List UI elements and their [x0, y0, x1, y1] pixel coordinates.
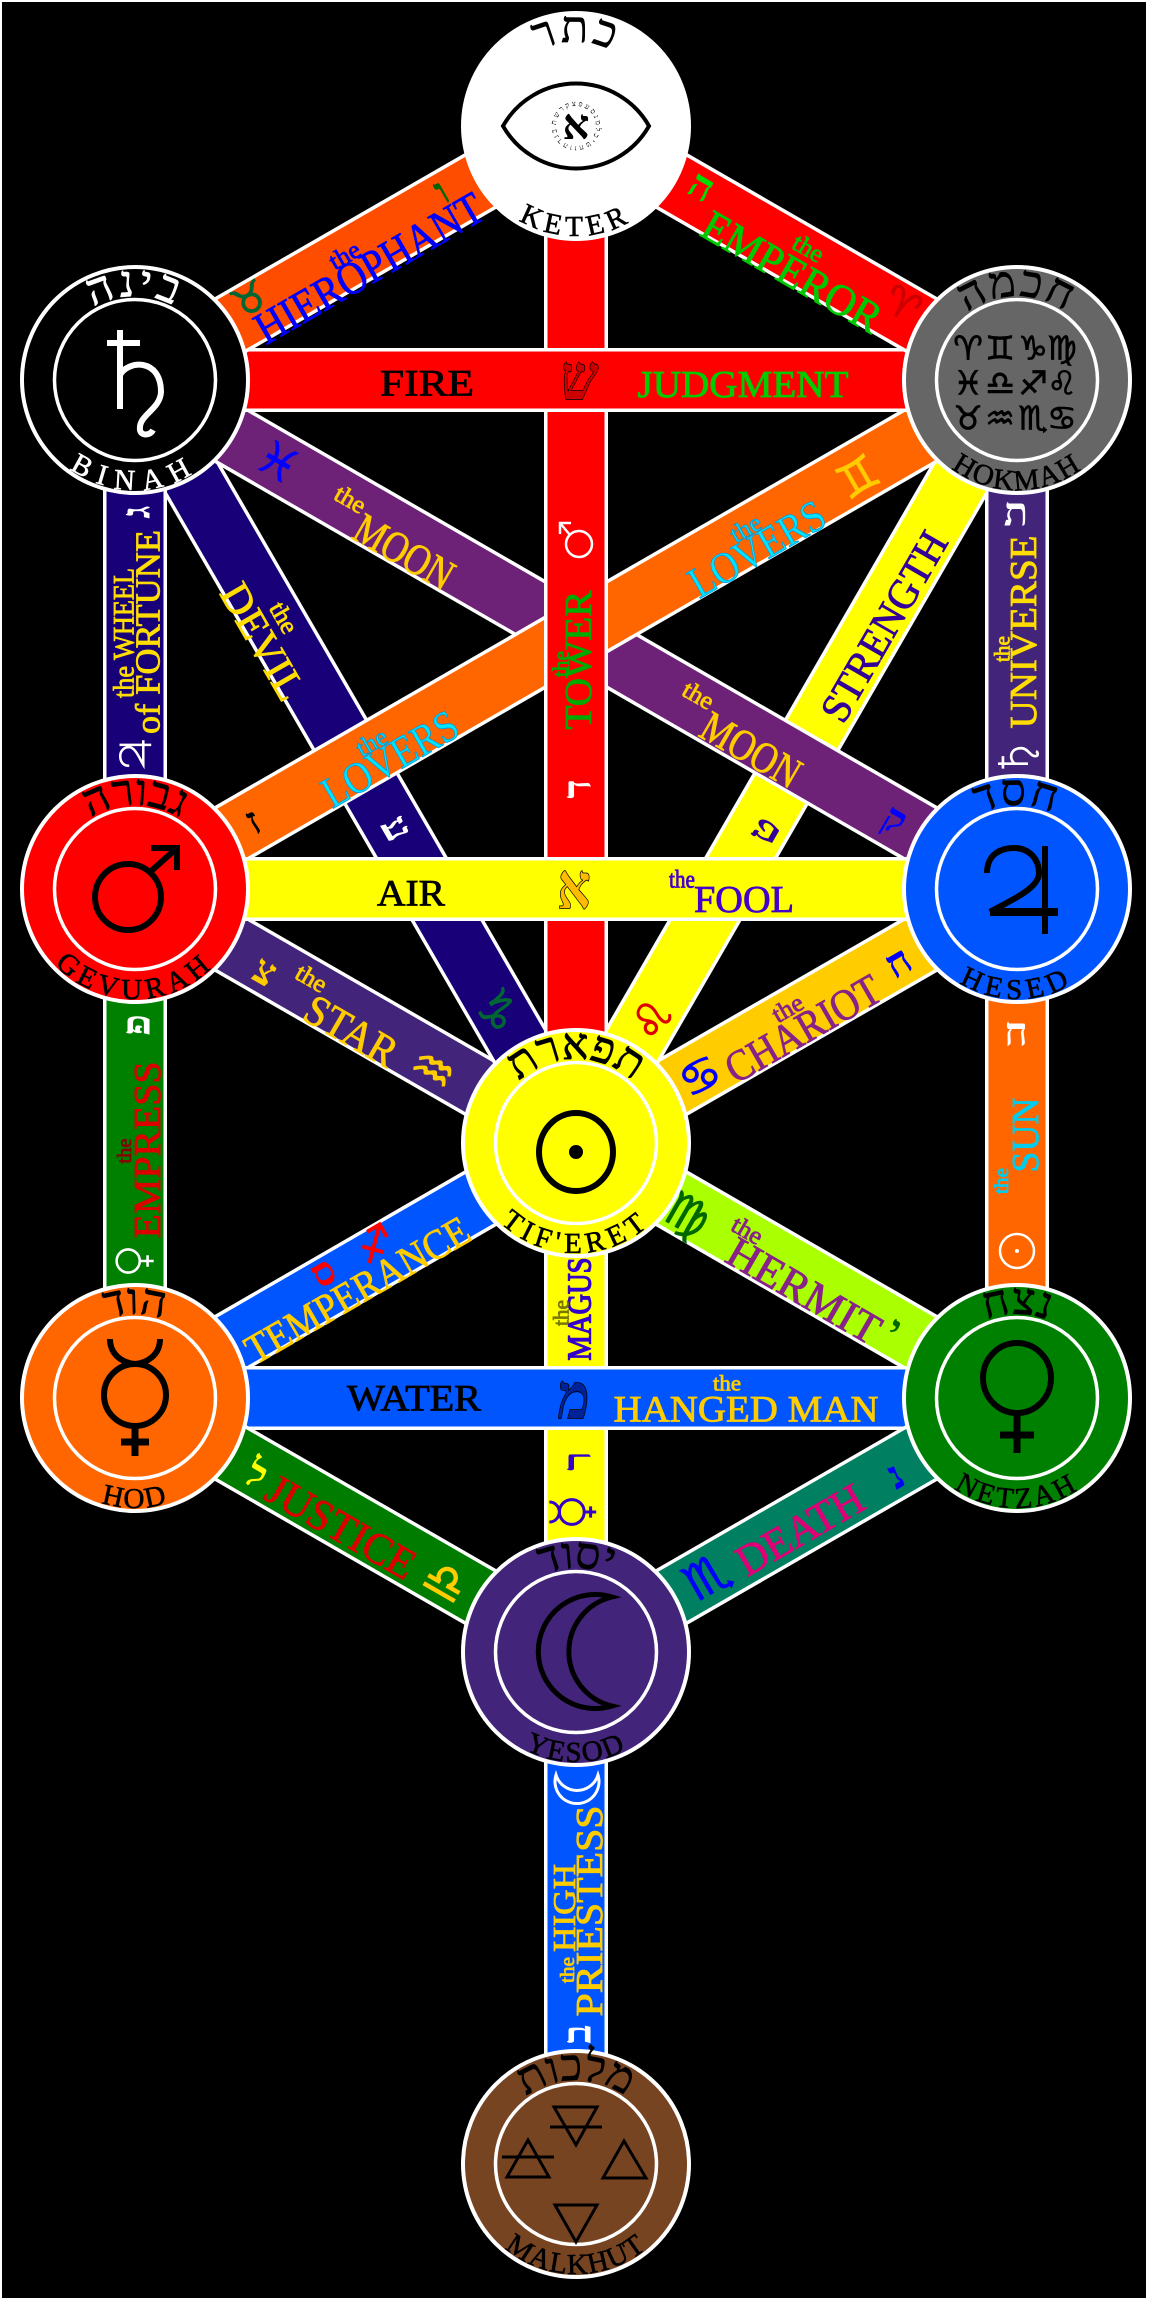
path: the Tower: TOWER [558, 590, 600, 730]
path: the Sun: ח [1004, 1010, 1028, 1054]
path: the Moon: the [329, 480, 371, 520]
path: the Sun [991, 889, 1047, 1398]
sephirah: Hesed [902, 774, 1132, 1004]
sephirah: Hokmah [902, 265, 1132, 495]
path: Death: ♏︎ [673, 1541, 741, 1613]
path: the Emperor: ♈︎ [875, 276, 929, 334]
path: the Star: the [290, 959, 332, 999]
path: the Devil: DEVIL [210, 575, 314, 709]
path: the Moon: MOON [345, 504, 463, 600]
path: the Lovers [135, 380, 1017, 889]
icon: zodiac grid: ♍︎ [1047, 328, 1077, 368]
sephirah: Tiferet [461, 1028, 691, 1258]
path: the Universe: UNIVERSE [1003, 536, 1045, 728]
sephirah: Keter: כתר [530, 16, 616, 48]
sephirah: Hokmah: HOKMAH [951, 452, 1082, 491]
path: the Devil: ע [372, 807, 422, 849]
icon: zodiac grid: ♒︎ [985, 398, 1015, 438]
path: the Hierophant: ♉︎ [223, 271, 277, 329]
icon: zodiac grid: ♎︎ [985, 364, 1015, 402]
icon: Moon [538, 1594, 612, 1708]
sephirah: Binah [20, 265, 250, 495]
path: Fire / Judgment: JUDGMENT [638, 364, 848, 406]
path: the Universe: the [990, 636, 1014, 662]
path: Temperance: ♐︎ [346, 1213, 404, 1275]
path: the Moon: the [677, 676, 719, 716]
sephirah: Netzah: נצח [983, 1287, 1051, 1319]
path: Water / the Hanged Man: מ [554, 1362, 594, 1432]
path: Strength: ט [738, 808, 790, 852]
icon: crescent [555, 1775, 599, 1804]
path: Death [576, 1398, 1017, 1652]
path: the Devil: ♑︎ [461, 978, 531, 1044]
path: the Hierophant: HIEROPHANT [245, 182, 493, 354]
path: the Sun: the [991, 1168, 1013, 1194]
path: Wheel of Fortune [108, 380, 168, 889]
path: the Emperor: the [787, 229, 829, 269]
path: Water / the Hanged Man: HANGED MAN [614, 1390, 878, 1430]
icon: Saturn [107, 330, 161, 434]
icon: zodiac grid: ♑︎ [1018, 328, 1048, 368]
sephirah: Tiferet: תפארת [507, 1032, 643, 1080]
path: the Moon: ♓︎ [247, 428, 309, 496]
path: the Magus: ר [554, 1451, 600, 1471]
path: Death: נ [878, 1452, 912, 1498]
icon: Mars [560, 523, 592, 557]
sephirah: Hod: הוד [102, 1288, 166, 1318]
path: the Hermit [576, 1143, 1017, 1398]
path: the Universe [990, 380, 1045, 889]
path: Death: DEATH [727, 1474, 873, 1586]
sephirah: Binah: BINAH [70, 452, 192, 491]
path: the Moon: ק [874, 794, 916, 844]
sephirah: Binah: בינה [86, 270, 179, 306]
path: the Moon [135, 380, 1017, 889]
path: the Universe: ת [1004, 490, 1028, 534]
sephirah: Tiferet: TIF'ERET [503, 1208, 644, 1254]
path: the Moon: MOON [692, 702, 810, 798]
path: the Emperor [576, 126, 1017, 380]
path: Fire / Judgment: FIRE [380, 364, 474, 404]
icon: zodiac grid: ♏︎ [1018, 398, 1048, 438]
path: the Devil [135, 380, 576, 1143]
path: the High Priestess: HIGH [546, 1864, 582, 1952]
sephirah: Yesod [461, 1537, 691, 1767]
sephirah: Yesod: יסוד [536, 1542, 615, 1572]
sephirah: Malkhut [461, 2044, 691, 2279]
icon: Sun [539, 1113, 613, 1191]
icon: zodiac grid: ♌︎ [1047, 364, 1077, 402]
path: the Lovers: the [351, 723, 393, 763]
path: the Hermit: י [878, 1307, 910, 1351]
sephirah: Hokmah: חכמה [957, 270, 1074, 311]
path: the Magus: MAGUS [562, 1258, 598, 1360]
sephirah: Hod [20, 1283, 250, 1513]
sephirah: Hod: HOD [102, 1484, 164, 1508]
path: Air / the Fool: the [669, 866, 695, 894]
path: the Hermit: HERMIT [718, 1227, 890, 1355]
sephirah: Netzah [902, 1283, 1132, 1513]
path: the High Priestess: the [557, 1957, 579, 1983]
path: the Hierophant: ו [425, 169, 457, 213]
path: the Hierophant: the [324, 236, 366, 276]
sephirah: Malkhut: MALKHUT [504, 2232, 643, 2274]
path: the Empress: פ [114, 1014, 158, 1036]
path: the Emperor: EMPEROR [693, 201, 891, 344]
path: the Devil: the [263, 597, 303, 639]
sephirah: Netzah: NETZAH [954, 1472, 1078, 1509]
sephirah: Gevurah [20, 774, 250, 1004]
icon: Mars [95, 848, 177, 930]
path: the Tower: ד [554, 779, 600, 799]
sephirah: Hesed: HESED [959, 966, 1066, 1000]
path: the High Priestess: PRIESTESS [569, 1805, 611, 2017]
icon: zodiac grid [953, 328, 1077, 438]
icon: Mercury [104, 1339, 166, 1456]
icon: four elements [502, 2107, 646, 2242]
path: the Star: ♒︎ [399, 1034, 467, 1106]
path: the Chariot: CHARIOT [716, 965, 890, 1093]
path: the High Priestess: ב [554, 2024, 600, 2044]
path: Wheel of Fortune: of FORTUNE [128, 530, 168, 734]
path: Strength [576, 380, 1017, 1143]
path: the Lovers: ♊︎ [827, 443, 889, 511]
path: the Magus: the [548, 1300, 574, 1326]
path: Air / the Fool: AIR [377, 874, 445, 914]
path: Fire / Judgment [135, 343, 1017, 413]
path: the High Priestess [546, 1652, 611, 2164]
path: Air / the Fool: FOOL [694, 879, 794, 921]
path: Justice: ל [237, 1449, 276, 1498]
path: the Star: צ [245, 946, 285, 996]
path: the Lovers: ז [237, 799, 269, 843]
path: the Chariot: the [767, 989, 809, 1029]
icon: eye: בגדהוזחטיכלמנסעפצקרשת [552, 102, 602, 150]
path: the Lovers: the [725, 509, 767, 549]
icon: zodiac grid: ♐︎ [1018, 364, 1048, 402]
path: the Emperor: ה [681, 161, 723, 211]
path: the Star: STAR [295, 985, 407, 1078]
sephirah: Yesod: YESOD [530, 1732, 622, 1762]
path: the Empress: EMPRESS [127, 1062, 169, 1238]
path: Temperance: TEMPERANCE [237, 1208, 479, 1374]
icon: Saturn [998, 748, 1038, 769]
path: the Tower: the [549, 651, 575, 677]
icon: eye [500, 82, 652, 170]
path: the Lovers: LOVERS [313, 700, 467, 818]
icon: zodiac grid: ♊︎ [985, 328, 1015, 368]
path: Strength: STRENGTH [812, 524, 958, 730]
icon: Jupiter [987, 846, 1058, 934]
path: Air / the Fool: א [557, 851, 591, 923]
path: the Hierophant [135, 126, 576, 380]
path: the Hermit: ♍︎ [654, 1180, 720, 1250]
path: Air / the Fool [135, 851, 1017, 923]
icon: zodiac grid: ♋︎ [1047, 398, 1077, 438]
sephirah: Gevurah: GEVURAH [58, 954, 212, 1000]
icon: Venus [117, 1249, 154, 1273]
path: Strength: ♌︎ [618, 989, 686, 1051]
path: the Empress: the [114, 1138, 136, 1164]
icon: Venus [983, 1343, 1051, 1453]
path: Water / the Hanged Man: the [713, 1370, 741, 1396]
path: the Chariot [576, 889, 1017, 1143]
path: the Sun: SUN [1005, 1098, 1047, 1172]
icon: zodiac grid: ♓︎ [953, 364, 983, 402]
sephirah: Malkhut: מלכות [517, 2044, 632, 2096]
path: Justice: ♎︎ [412, 1547, 478, 1617]
sephirah: Keter: KETER [518, 203, 629, 236]
icon: Jupiter [120, 740, 151, 766]
path: the Tower [549, 126, 600, 1143]
path: the Hermit: the [726, 1211, 768, 1251]
path: Water / the Hanged Man [135, 1362, 1017, 1432]
path: Justice [135, 1398, 576, 1652]
path: Wheel of Fortune: ג [114, 505, 158, 519]
path: the Lovers: LOVERS [680, 490, 834, 608]
sephirah: Gevurah: גבורה [82, 778, 188, 818]
icon: Sun symbol [1000, 1234, 1034, 1268]
path: Temperance: ס [302, 1247, 344, 1297]
sephirah: Hesed: חסד [972, 779, 1058, 812]
path: Wheel of Fortune: the WHEEL [108, 568, 140, 698]
icon: zodiac grid: ♈︎ [953, 328, 983, 368]
path: the Chariot: ח [876, 937, 920, 987]
sephirah: Keter [461, 11, 691, 241]
path: Justice: JUSTICE [257, 1465, 425, 1589]
path: the Chariot: ♋︎ [669, 1042, 731, 1110]
path: Fire / Judgment: ש [557, 343, 602, 413]
path: Water / the Hanged Man: WATER [347, 1378, 481, 1420]
path: the Magus [548, 1143, 600, 1652]
icon: zodiac grid: ♉︎ [953, 398, 983, 438]
icon: eye: א [563, 103, 589, 149]
path: the Star [135, 889, 576, 1143]
path: Temperance [135, 1143, 576, 1398]
path: the Empress [114, 889, 169, 1398]
icon: Mercury [549, 1500, 596, 1524]
